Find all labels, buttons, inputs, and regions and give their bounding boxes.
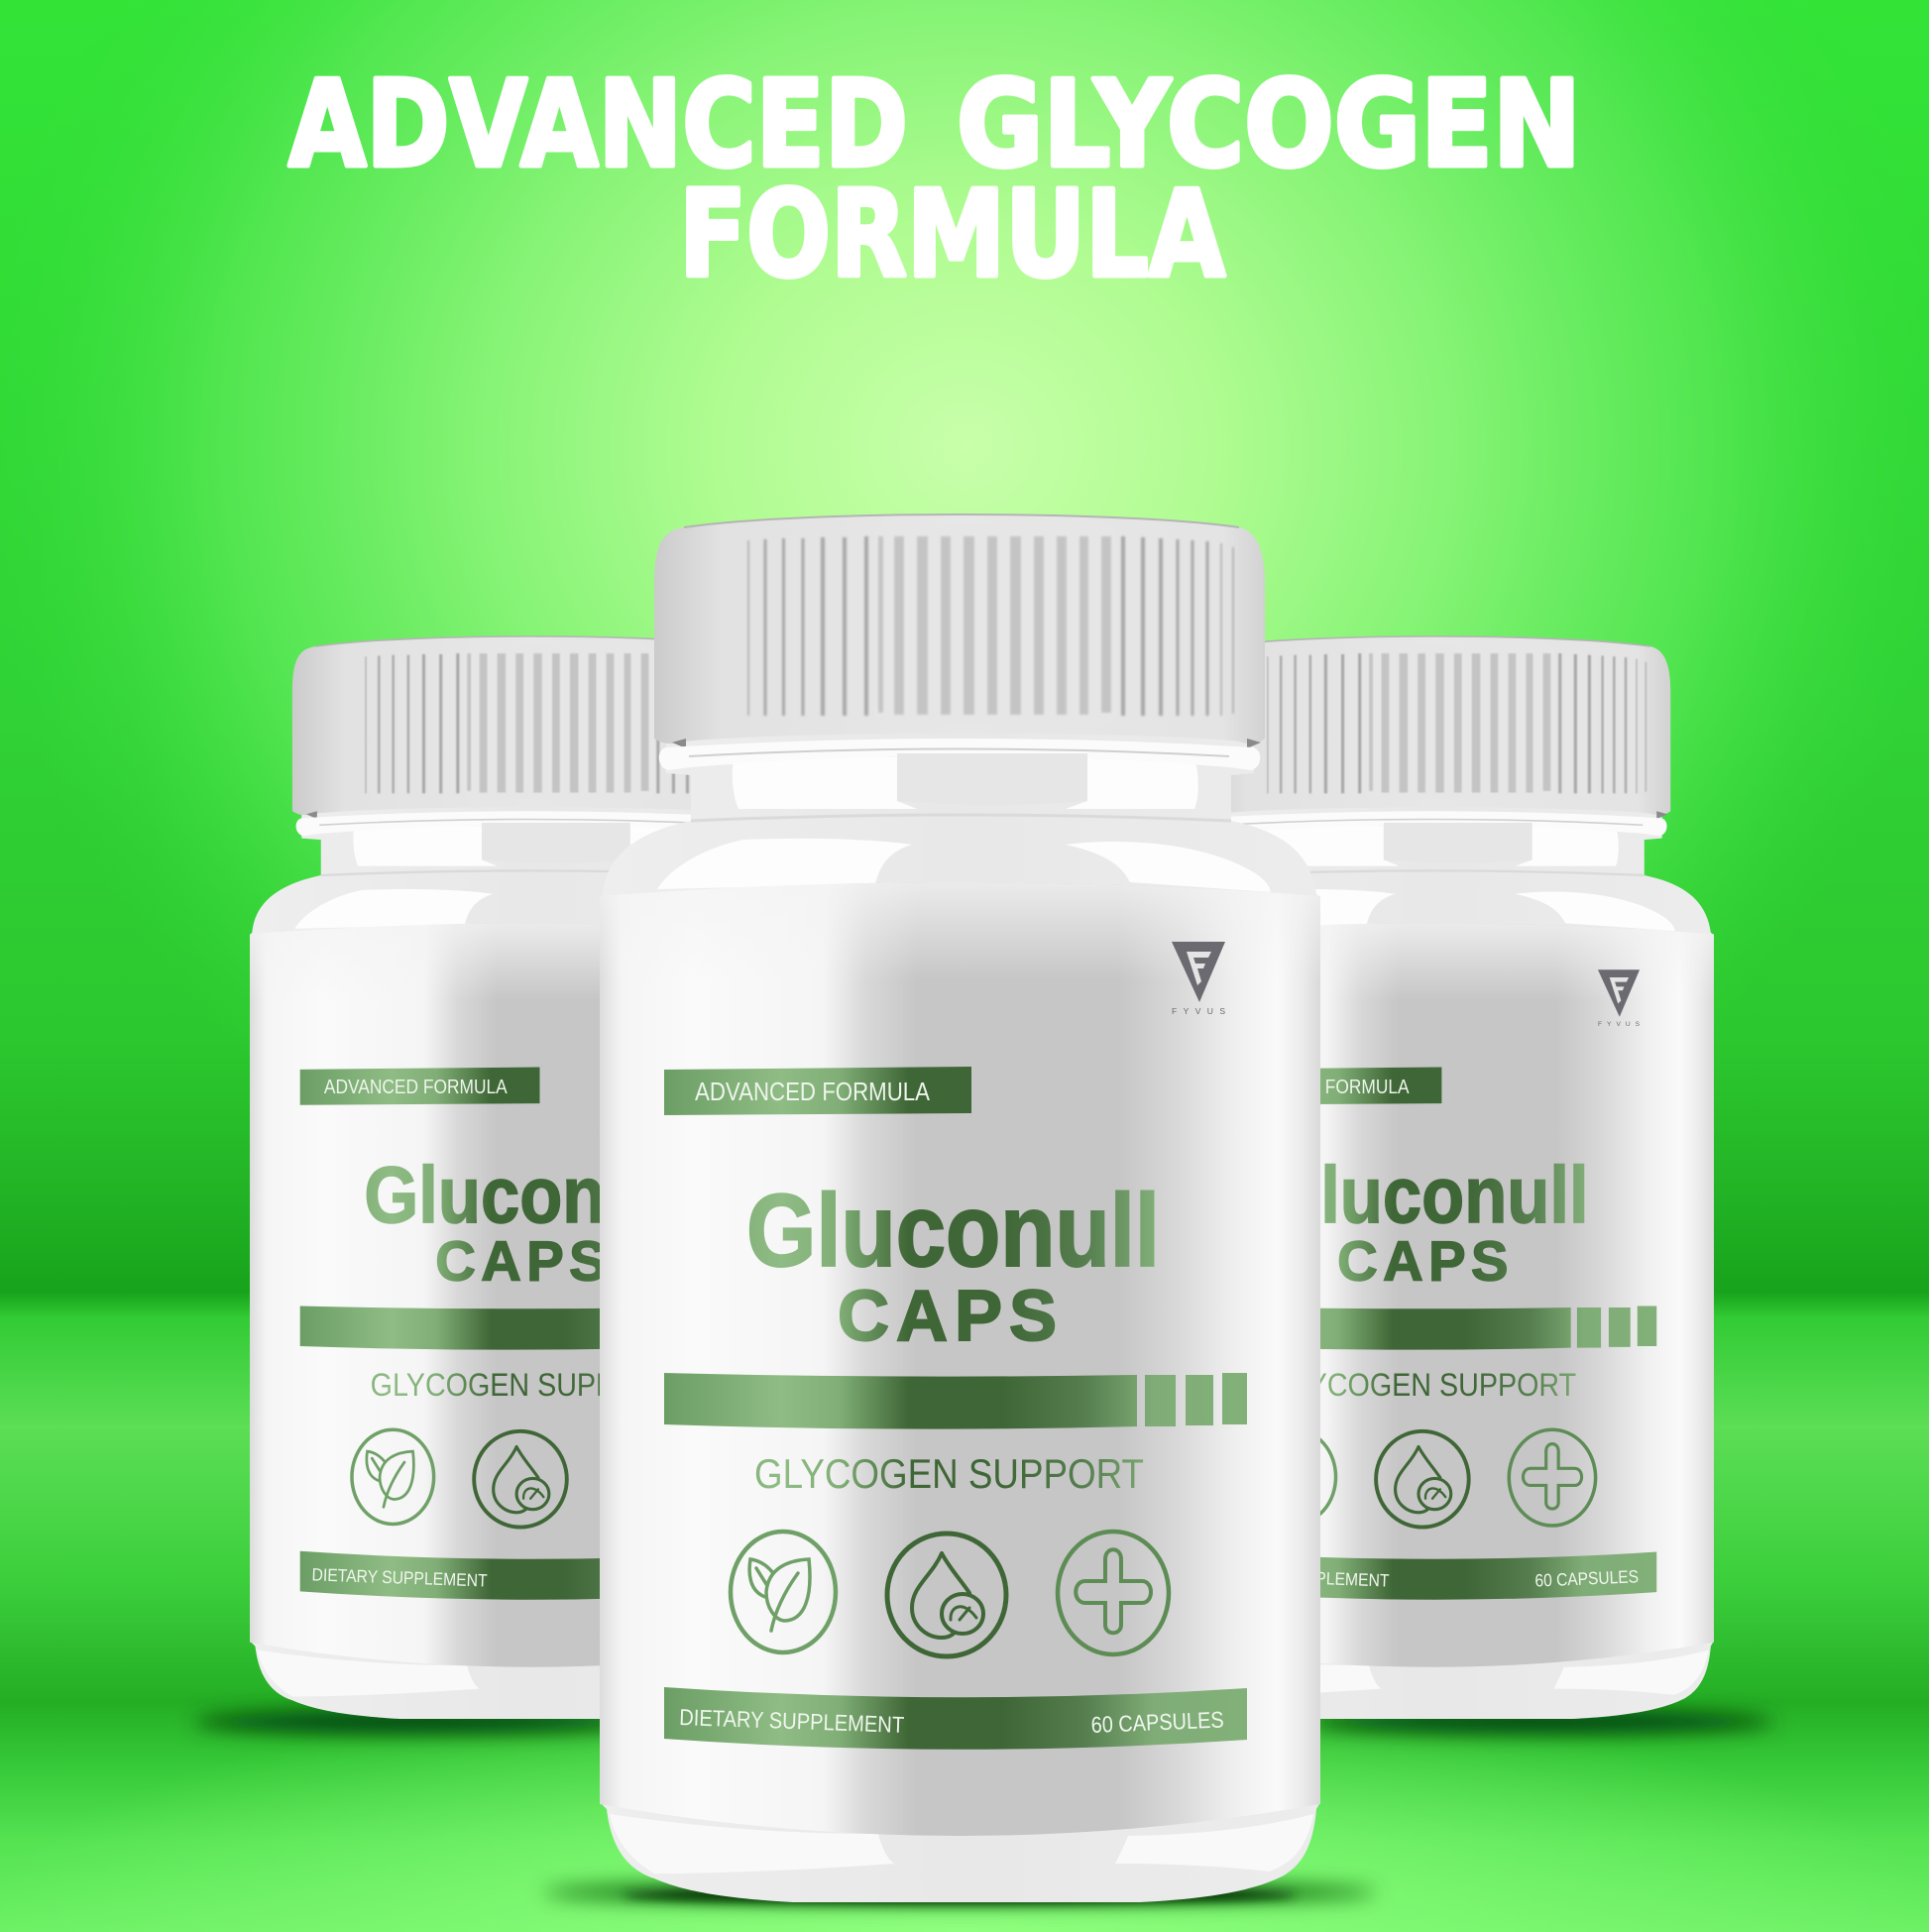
tagline: GLYCOGEN SUPPORT (754, 1450, 1144, 1497)
shadow: left bottle (193, 1710, 639, 1734)
label top fade (600, 882, 1320, 981)
neck shade (1384, 823, 1532, 863)
bottle body (250, 803, 812, 1719)
neck highlights (733, 757, 1198, 809)
icon: leaf (352, 1429, 434, 1524)
shoulder highlights (1196, 889, 1675, 931)
tagline: GLYCOGEN SUPPORT (1273, 1366, 1576, 1403)
band: dietary supplement and capsule count: DIETARY SUPPLEMENT (1213, 1564, 1390, 1591)
label top fade (1152, 923, 1714, 1000)
neck highlights (353, 826, 717, 866)
bottle ring (659, 739, 1260, 770)
cap edge notches (672, 739, 1261, 748)
green bar with blocks (664, 1373, 1247, 1429)
bottle ring (296, 811, 765, 836)
cap ridged panel (465, 645, 652, 799)
left bottle (250, 636, 812, 1719)
base highlight (1160, 1650, 1709, 1696)
band: dietary supplement and capsule count (300, 1551, 754, 1600)
logo: FYVUS: FYVUS (696, 1021, 738, 1028)
cap top rim (315, 636, 748, 646)
icon: medical plus (607, 1429, 694, 1526)
icon: leaf (731, 1532, 836, 1652)
icon: drop with gauge (1376, 1431, 1469, 1528)
label wrap (1152, 923, 1714, 1667)
tagline: GLYCOGEN SUPPORT (371, 1366, 674, 1403)
background: green wall with glow (0, 0, 1929, 1293)
background: green floor (0, 1293, 1929, 1932)
ring shade line (689, 749, 1229, 756)
icon: medical plus (1058, 1532, 1169, 1654)
shadow: center bottle (543, 1881, 1376, 1903)
icon: leaf (1254, 1429, 1336, 1524)
shoulder highlights (657, 839, 1271, 892)
cap (654, 514, 1265, 743)
band: dietary supplement and capsule count (664, 1687, 1247, 1750)
neck base line (691, 815, 1231, 821)
logo: FYVUS (1172, 942, 1225, 1016)
icon: drop with gauge (474, 1431, 567, 1528)
band: dietary supplement and capsule count: 60 CAPSULES (632, 1566, 738, 1591)
title (288, 57, 1581, 304)
base highlight (258, 1650, 807, 1696)
cap ridges (366, 653, 743, 793)
green bar with blocks (300, 1307, 754, 1350)
neck shade (897, 753, 1087, 805)
neck base line (1223, 870, 1645, 875)
right bottle (1152, 636, 1714, 1719)
badge: advanced formula (1202, 1067, 1441, 1105)
band: dietary supplement and capsule count (1202, 1551, 1656, 1600)
icon: drop with gauge (887, 1534, 1006, 1656)
title line 1 word 1: ADVANCED (288, 57, 908, 194)
product subtitle: CAPS (1337, 1230, 1508, 1293)
logo: FYVUS: FYVUS (1598, 1021, 1641, 1028)
icon: medical plus (1509, 1429, 1596, 1526)
cap ridges (1268, 653, 1645, 793)
title line 1 word 2: GLYCOGEN (957, 57, 1581, 194)
product subtitle: CAPS (838, 1277, 1057, 1356)
neck highlights (1255, 826, 1619, 866)
band: dietary supplement and capsule count: DIETARY SUPPLEMENT (679, 1704, 905, 1738)
badge: advanced formula: ADVANCED FORMULA (695, 1077, 931, 1106)
green bar with blocks (1202, 1307, 1656, 1350)
badge: advanced formula: ADVANCED FORMULA (324, 1077, 508, 1098)
cap (292, 636, 768, 815)
bottle body (1152, 803, 1714, 1719)
badge: advanced formula (664, 1067, 971, 1115)
base highlight (610, 1814, 1313, 1874)
cap (1194, 636, 1670, 815)
badge: advanced formula: ADVANCED FORMULA (1226, 1077, 1410, 1098)
logo: FYVUS (1598, 969, 1641, 1028)
cap top rim (1217, 636, 1650, 646)
bottle body (600, 729, 1320, 1902)
band: dietary supplement and capsule count: 60 CAPSULES (1090, 1706, 1224, 1738)
bottle ring (1197, 811, 1667, 836)
title line 2: FORMULA (679, 167, 1225, 304)
ring shade line (319, 819, 740, 825)
cap ridged panel (875, 526, 1116, 723)
ring shade line (1221, 819, 1643, 825)
band: dietary supplement and capsule count: DIETARY SUPPLEMENT (311, 1564, 488, 1591)
badge: advanced formula (300, 1067, 539, 1105)
band: dietary supplement and capsule count: 60 CAPSULES (1534, 1566, 1639, 1591)
shoulder highlights (294, 889, 773, 931)
cap ridges (748, 536, 1233, 716)
cap edge notches (306, 811, 765, 819)
cap ridged panel (1367, 645, 1554, 799)
cap top rim (684, 514, 1239, 527)
neck shade (482, 823, 630, 863)
label wrap (600, 882, 1320, 1836)
label wrap (250, 923, 812, 1667)
center bottle (600, 514, 1320, 1902)
logo: FYVUS: FYVUS (1172, 1006, 1225, 1016)
cap edge notches (1208, 811, 1667, 819)
product name: Gluconull (1266, 1151, 1589, 1240)
neck base line (321, 870, 742, 875)
product subtitle: CAPS (435, 1230, 607, 1293)
label top fade (250, 923, 812, 1000)
product name: Gluconull (746, 1174, 1160, 1289)
shadow: right bottle (1308, 1710, 1774, 1734)
logo: FYVUS (696, 969, 738, 1028)
product name: Gluconull (364, 1151, 687, 1240)
